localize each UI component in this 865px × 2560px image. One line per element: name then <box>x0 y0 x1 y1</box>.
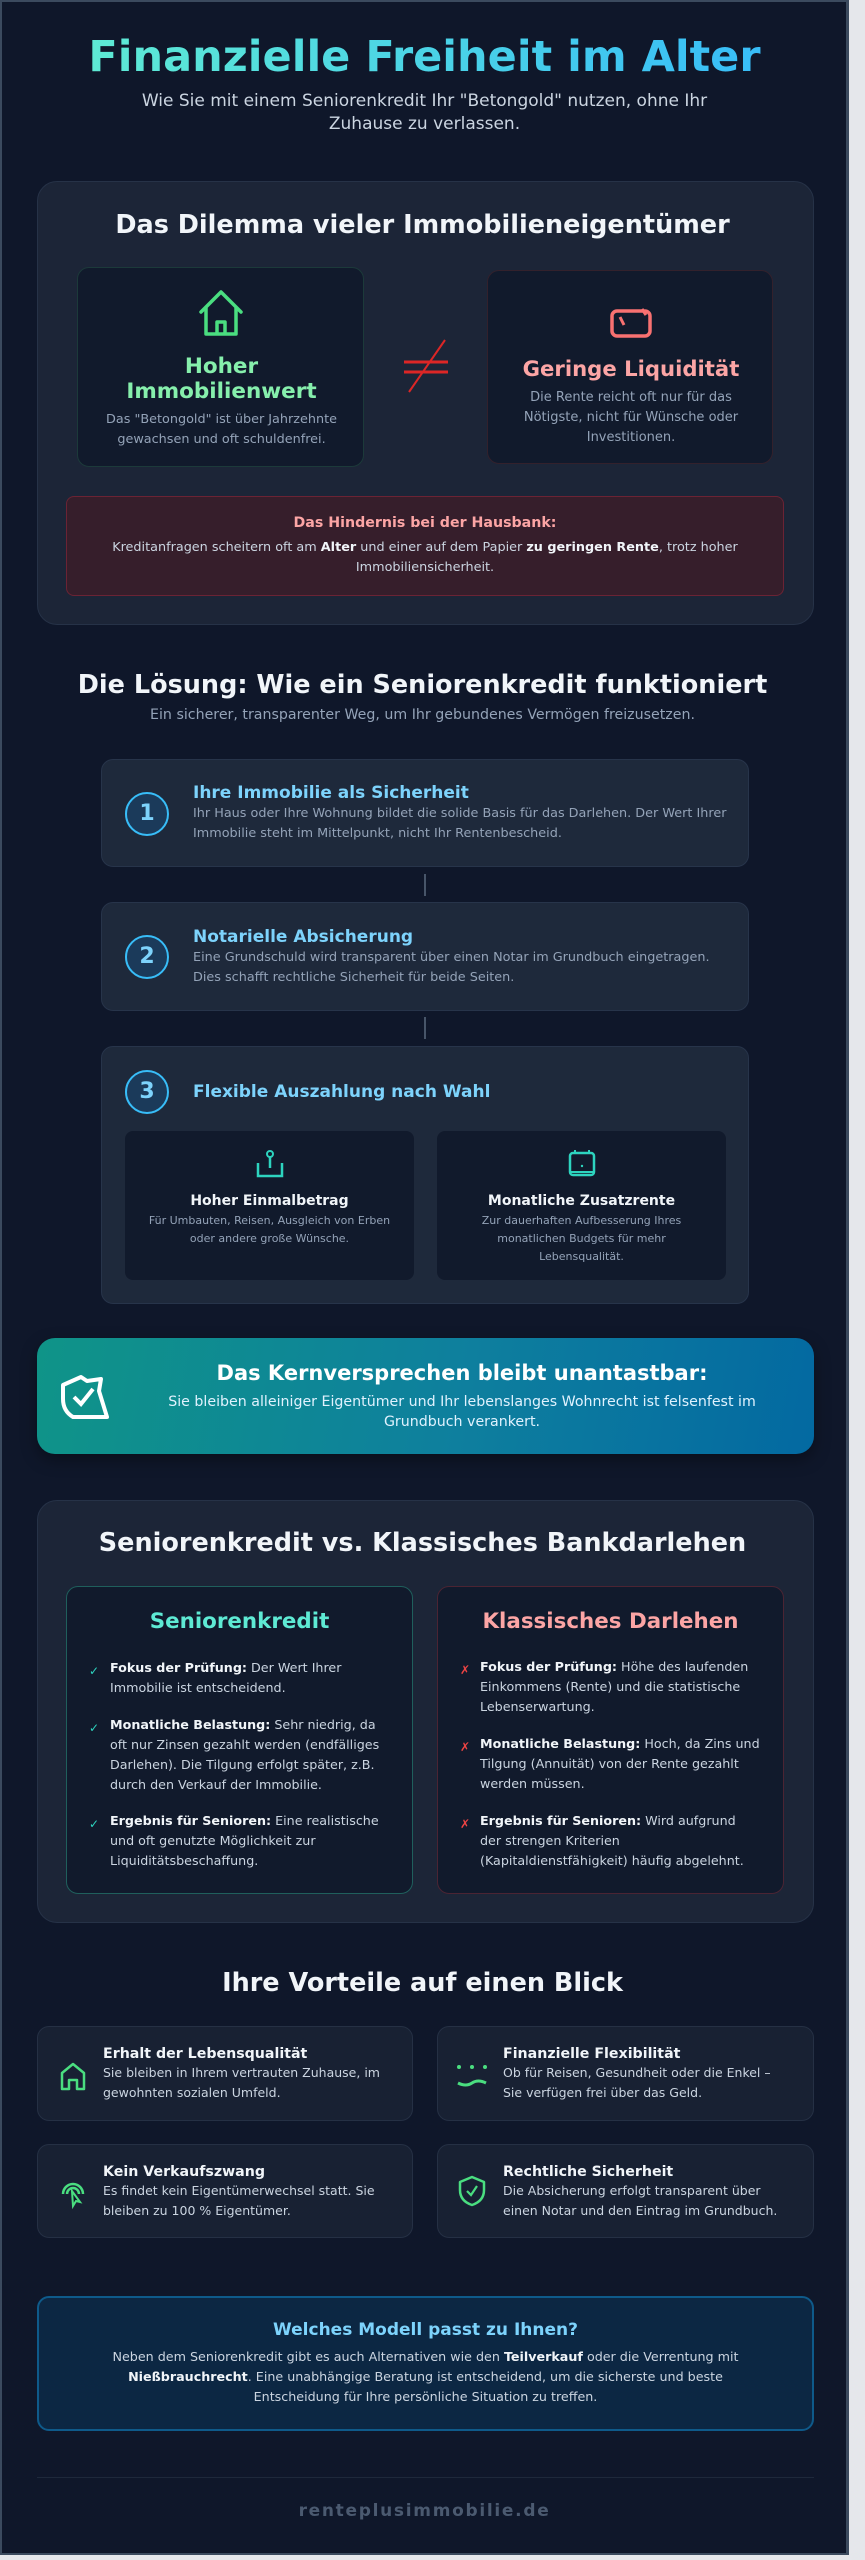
subcard: monthly: monatlichen Budgets für mehr <box>497 1232 666 1245</box>
card: classic loan: Einkommens (Rente) und die statistische <box>480 1679 740 1694</box>
card: no forced sale: bleiben zu 100 % Eigentümer. <box>103 2203 291 2218</box>
card: senior loan: Darlehen). Die Tilgung erfolgt später, z.B. <box>110 1757 375 1772</box>
card title <box>126 354 317 404</box>
callout: which model: Nießbrauchrecht. Eine unabhängige Beratung ist entscheidend, um die sicherste und beste <box>128 2369 723 2384</box>
subcard: lump sum: oder andere große Wünsche. <box>190 1232 349 1245</box>
card: classic loan: Tilgung (Annuität) von der Rente gezahlt <box>480 1756 739 1771</box>
card: classic loan: Klassisches Darlehen <box>482 1609 738 1634</box>
card: senior loan: ✓ <box>89 1664 99 1678</box>
card: senior loan: Ergebnis für Senioren: Eine realistische <box>110 1813 379 1828</box>
card title: Hoher <box>185 354 258 379</box>
card: classic loan: der strengen Kriterien <box>480 1833 620 1848</box>
subcard: monthly: Lebensqualität. <box>539 1250 624 1263</box>
subcard: monthly: Monatliche Zusatzrente <box>488 1193 675 1209</box>
step 3: 3 <box>139 1079 155 1104</box>
card: classic loan: Lebenserwartung. <box>480 1699 595 1714</box>
card: no forced sale: Kein Verkaufszwang <box>103 2164 265 2180</box>
card: senior loan <box>66 1586 413 1894</box>
step 3: Flexible Auszahlung nach Wahl <box>193 1082 490 1102</box>
card: no forced sale <box>37 2144 413 2238</box>
card text: gewachsen und oft schuldenfrei. <box>117 432 326 447</box>
card title: Immobilienwert <box>126 379 317 404</box>
heading: dilemma: Das Dilemma vieler Immobilieneigentümer <box>115 210 730 240</box>
card: senior loan: Fokus der Prüfung: Der Wert Ihrer <box>110 1660 341 1675</box>
step 2: Notarielle Absicherung <box>193 927 413 947</box>
card: flexibility: Ob für Reisen, Gesundheit oder die Enkel – <box>503 2065 771 2080</box>
card: classic loan: ✗ <box>460 1740 470 1754</box>
subtitle <box>142 91 708 134</box>
card: quality of life: gewohnten sozialen Umfeld. <box>103 2085 281 2100</box>
subcard: lump sum: Hoher Einmalbetrag <box>190 1193 349 1209</box>
card: flexibility <box>437 2026 814 2121</box>
title: Finanzielle Freiheit im Alter <box>88 32 761 82</box>
icon: calendar <box>568 1150 596 1176</box>
heading: solution: Die Lösung: Wie ein Seniorenkredit funktioniert <box>78 670 767 700</box>
heading: benefits: Ihre Vorteile auf einen Blick <box>222 1968 623 1998</box>
card: senior loan: Liquiditätsbeschaffung. <box>110 1853 258 1868</box>
subcard: lump sum: Für Umbauten, Reisen, Ausgleich von Erben <box>149 1214 390 1227</box>
banner: core promise <box>37 1338 814 1454</box>
card: classic loan: Fokus der Prüfung: Höhe des laufenden <box>480 1659 748 1674</box>
card: low liquidity <box>487 270 773 464</box>
card: legal security: Rechtliche Sicherheit <box>503 2164 673 2180</box>
callout: bank obstacle: Kreditanfragen scheitern oft am Alter und einer auf dem Papier zu geringen Rente, trotz hoher <box>112 540 738 555</box>
card: legal security: Die Absicherung erfolgt transparent über <box>503 2183 761 2198</box>
card: classic loan <box>437 1586 784 1894</box>
card: classic loan: ✗ <box>460 1663 470 1677</box>
icon: house <box>199 290 243 336</box>
icon: payout <box>256 1150 284 1178</box>
step 2: 2 <box>139 944 155 969</box>
card: flexibility: Finanzielle Flexibilität <box>503 2046 680 2062</box>
card: high property value <box>77 267 364 467</box>
icon: not equal <box>404 339 448 393</box>
card text: Nötigste, nicht für Wünsche oder <box>524 410 738 425</box>
card: classic loan: werden müssen. <box>480 1776 585 1791</box>
footer: renteplusimmobilie.de <box>299 2501 550 2521</box>
panel: comparison <box>37 1500 814 1923</box>
card: senior loan: und oft genutzte Möglichkeit zur <box>110 1833 316 1848</box>
card: senior loan: durch den Verkauf der Immobilie. <box>110 1777 322 1792</box>
icon: shield check <box>61 1375 110 1419</box>
callout: which model <box>37 2296 814 2431</box>
card: classic loan: ✗ <box>460 1817 470 1831</box>
subtitle: Zuhause zu verlassen. <box>329 114 520 134</box>
card text: Die Rente reicht oft nur für das <box>530 390 732 405</box>
card text: Das "Betongold" ist über Jahrzehnte <box>106 412 337 427</box>
card: flexibility: Sie verfügen frei über das Geld. <box>503 2085 702 2100</box>
card: no forced sale: Es findet kein Eigentümerwechsel statt. Sie <box>103 2183 375 2198</box>
subcard: lump sum <box>125 1131 414 1280</box>
step 2: Eine Grundschuld wird transparent über einen Notar im Grundbuch eingetragen. <box>193 950 710 965</box>
banner: core promise: Das Kernversprechen bleibt unantastbar: <box>217 1361 707 1385</box>
callout: which model: Entscheidung für Ihre persönliche Situation zu treffen. <box>254 2389 597 2404</box>
card: legal security <box>437 2144 814 2238</box>
step 1: Ihr Haus oder Ihre Wohnung bildet die solide Basis für das Darlehen. Der Wert Ihrer <box>193 806 726 821</box>
banner: core promise: Sie bleiben alleiniger Eigentümer und Ihr lebenslanges Wohnrecht ist felsenfest im <box>168 1394 756 1410</box>
subtitle: solution: Ein sicherer, transparenter Weg, um Ihr gebundenes Vermögen freizusetzen. <box>150 707 695 723</box>
step 1 <box>101 759 749 867</box>
card: senior loan: oft nur Zinsen gezahlt werden (endfälliges <box>110 1737 379 1752</box>
callout: which model: Welches Modell passt zu Ihnen? <box>273 2320 578 2340</box>
step 2 <box>101 902 749 1011</box>
card: classic loan: Monatliche Belastung: Hoch, da Zins und <box>480 1736 760 1751</box>
callout: bank obstacle: Immobiliensicherheit. <box>356 560 494 575</box>
card: senior loan: Immobilie ist entscheidend. <box>110 1680 286 1695</box>
card text <box>524 390 738 445</box>
subcard: monthly <box>437 1131 726 1280</box>
panel: dilemma <box>37 181 814 625</box>
callout: bank obstacle <box>66 496 784 596</box>
subcard: monthly: Zur dauerhaften Aufbesserung Ihres <box>482 1214 681 1227</box>
card: senior loan: Monatliche Belastung: Sehr niedrig, da <box>110 1717 376 1732</box>
step 1: Ihre Immobilie als Sicherheit <box>193 783 469 803</box>
card text: Investitionen. <box>587 430 675 445</box>
heading: comparison: Seniorenkredit vs. Klassisches Bankdarlehen <box>99 1528 746 1558</box>
card: senior loan: Seniorenkredit <box>150 1609 329 1634</box>
step 1: Immobilie steht im Mittelpunkt, nicht Ihr Rentenbescheid. <box>193 826 562 841</box>
card: classic loan: (Kapitaldienstfähigkeit) häufig abgelehnt. <box>480 1853 744 1868</box>
subtitle: Wie Sie mit einem Seniorenkredit Ihr "Betongold" nutzen, ohne Ihr <box>142 91 707 111</box>
card: senior loan: ✓ <box>89 1817 99 1831</box>
card: quality of life: Sie bleiben in Ihrem vertrauten Zuhause, im <box>103 2065 380 2080</box>
card text <box>106 412 337 447</box>
card title: Geringe Liquidität <box>523 356 739 381</box>
card: quality of life: Erhalt der Lebensqualität <box>103 2046 307 2062</box>
icon: wallet <box>610 308 652 338</box>
banner: core promise: Grundbuch verankert. <box>384 1414 540 1430</box>
callout: bank obstacle: Das Hindernis bei der Hausbank: <box>294 515 556 531</box>
step 2: Dies schafft rechtliche Sicherheit für beide Seiten. <box>193 970 514 985</box>
card: classic loan: Ergebnis für Senioren: Wird aufgrund <box>480 1813 736 1828</box>
card: legal security: einen Notar und den Eintrag im Grundbuch. <box>503 2203 777 2218</box>
card: quality of life <box>37 2026 413 2121</box>
card: senior loan: ✓ <box>89 1721 99 1735</box>
callout: which model: Neben dem Seniorenkredit gibt es auch Alternativen wie den Teilverkauf oder die Verrentung mit <box>112 2349 739 2364</box>
step 3 <box>101 1046 749 1304</box>
step 1: 1 <box>139 801 155 826</box>
